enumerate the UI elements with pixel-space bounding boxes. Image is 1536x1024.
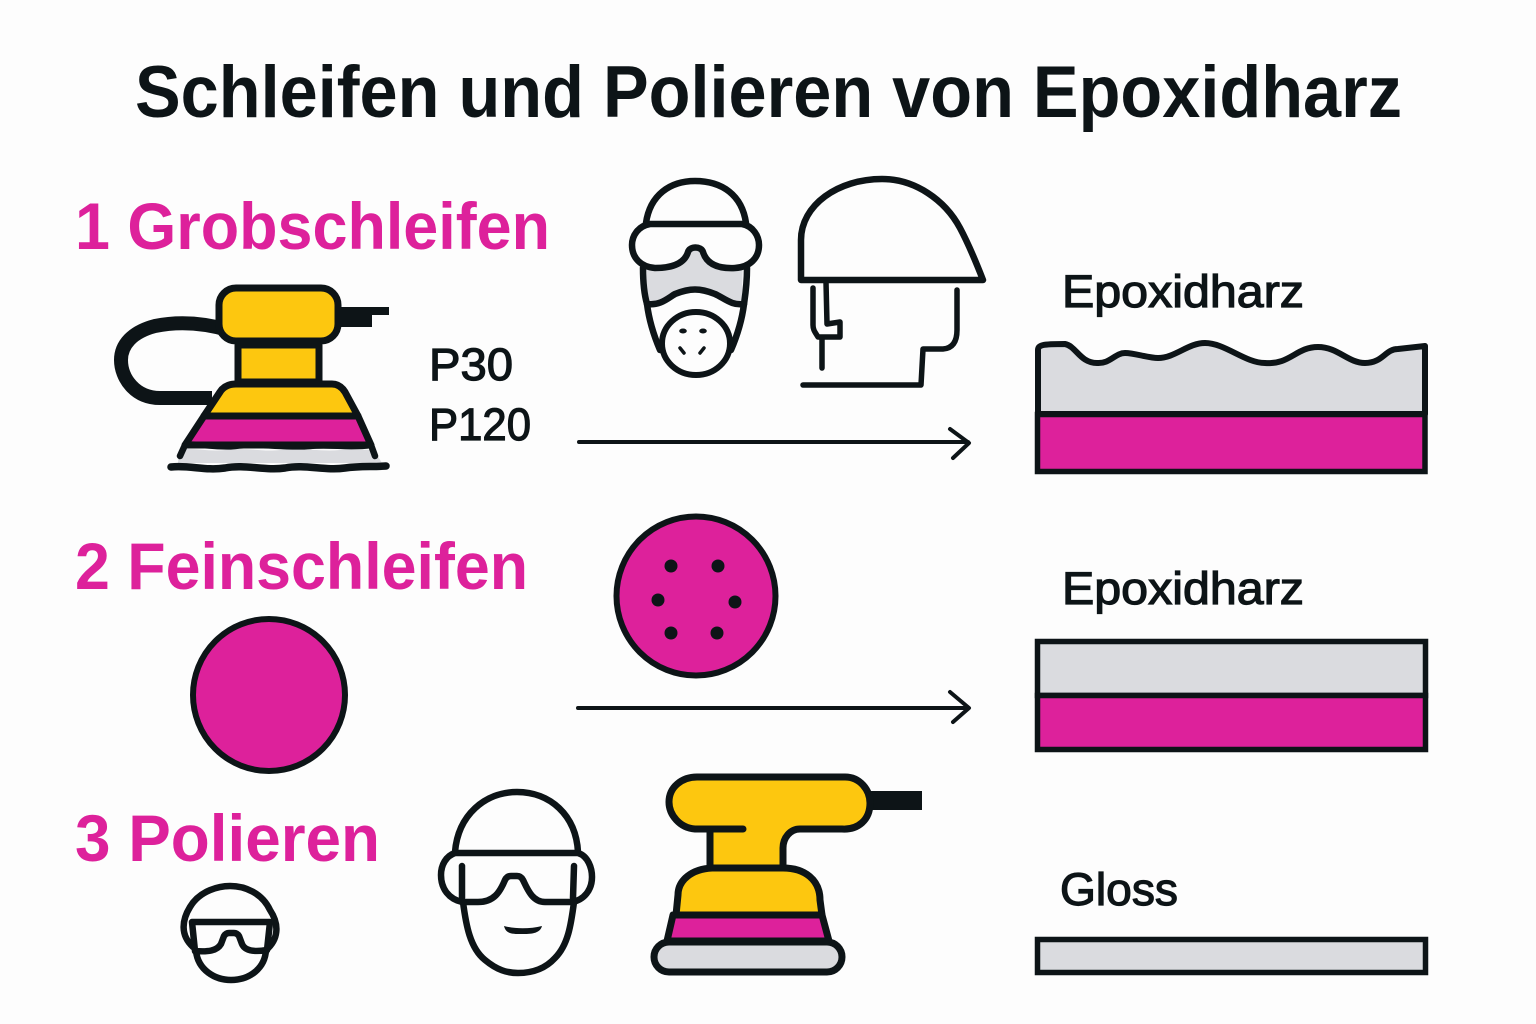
label: grit sizes: P30 — [429, 339, 513, 390]
icon: head with goggles and respirator — [632, 181, 759, 375]
arrow: step 2 to smooth surface — [578, 692, 969, 722]
icon: plain sanding disc — [193, 619, 345, 771]
diagram: gloss layer — [1038, 940, 1426, 972]
heading: step 3: 3 Polieren — [75, 801, 380, 875]
icon: coarse orbital sander — [121, 288, 389, 469]
icon: small head with goggles — [184, 886, 276, 980]
icon: large head with safety glasses — [441, 792, 592, 973]
diagram: rough epoxy layer — [1038, 343, 1425, 472]
label: grit sizes — [429, 339, 531, 450]
icon: polishing orbital sander — [654, 777, 922, 972]
arrow: step 1 to rough surface — [579, 429, 969, 458]
heading: step 2: 2 Feinschleifen — [75, 529, 528, 603]
icon: head with helmet in profile — [801, 179, 983, 385]
icon: perforated sanding disc — [616, 516, 776, 676]
label: epoxy smooth: Epoxidharz — [1062, 563, 1304, 614]
label: gloss: Gloss — [1060, 864, 1178, 915]
label: grit sizes: P120 — [429, 399, 531, 450]
title: Schleifen und Polieren von Epoxidharz — [135, 52, 1402, 133]
label: epoxy rough: Epoxidharz — [1062, 266, 1304, 317]
heading: step 1: 1 Grobschleifen — [75, 189, 550, 263]
diagram: smooth epoxy layer — [1038, 642, 1426, 750]
